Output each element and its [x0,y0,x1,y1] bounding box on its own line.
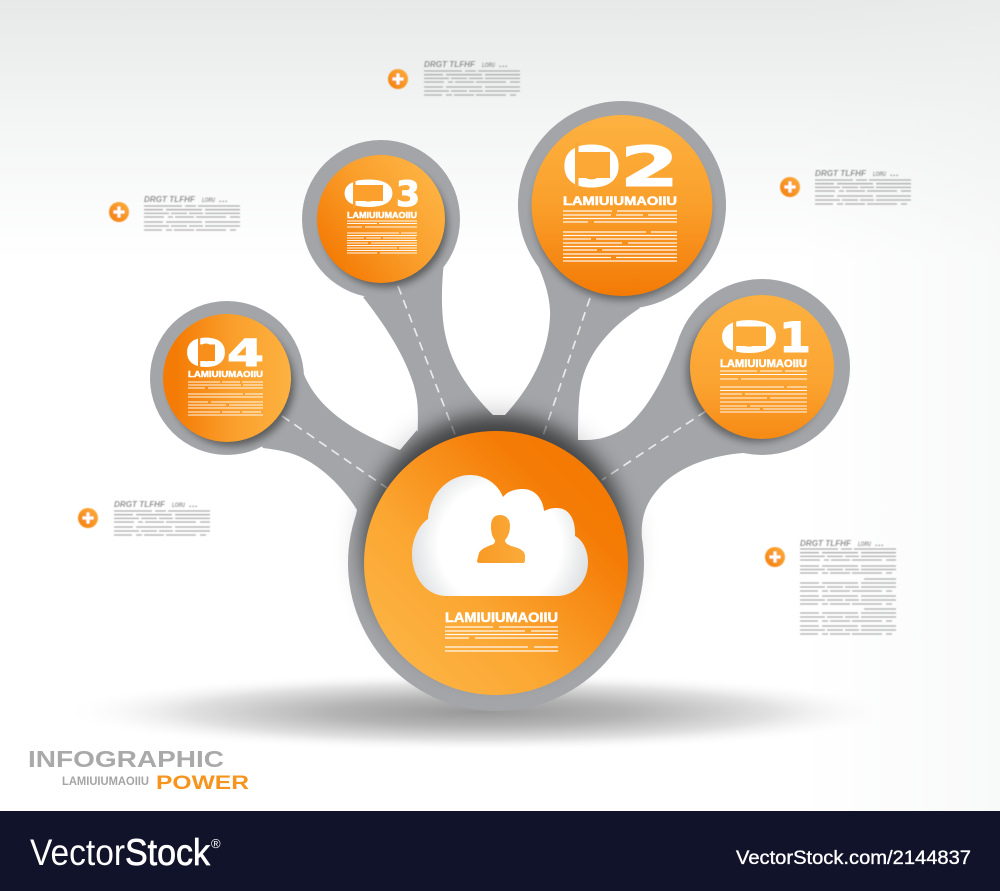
note: left of 03: DRGT TLFHF [144,194,196,204]
number 04 [185,332,264,375]
label 01: LAMIUIUMAOIIU [720,358,807,370]
note: right of 02: LORU [873,171,886,178]
footer bar [0,811,1000,891]
panel: central circle [364,431,628,695]
panel: circle 01 [690,295,834,439]
label 02: LAMIUIUMAOIIU [563,196,677,208]
note: right of 02 [780,168,911,204]
brand block: infographic power: INFOGRAPHIC [28,746,224,772]
note: right of 02: DRGT TLFHF [815,168,867,178]
icon: cloud with person [412,475,588,596]
brand block: infographic power [28,746,249,794]
note: top: LORU [482,62,495,69]
panel: circle 03 [317,155,445,283]
number 03 [342,175,420,215]
dashed connector lines [282,286,706,488]
panel: circle 04 [163,314,291,442]
note: left of 04: ... [189,499,198,509]
number 03: 3 [396,175,420,215]
number 03: 0 [342,175,395,215]
number 02: 2 [620,135,679,199]
note: left of 03: LORU [202,197,215,204]
note: left of 03 [109,194,240,230]
note: large right: ... [875,538,884,548]
registered mark: ® [211,836,221,851]
number 01: 0 [719,313,779,362]
image id: VectorStock.com/2144837 [736,848,971,869]
note: right of 02: ... [890,168,899,178]
note: top: DRGT TLFHF [424,59,476,69]
note: left of 04 [78,499,210,535]
panel: circle 02 [532,115,712,296]
text lines 03 [347,221,417,253]
note: large right: LORU [858,541,871,548]
label 04: LAMIUIUMAOIIU [188,369,263,379]
number 04: 0 [185,332,227,375]
footer logo: Stock [125,832,210,873]
note: left of 04: DRGT TLFHF [114,499,166,509]
central text lines [445,627,558,651]
panel: grey connector shape [150,101,850,711]
note: top: ... [499,59,508,69]
ground shadow [60,672,900,752]
text lines 01 [720,371,807,412]
text lines 04 [188,382,263,415]
brand block: infographic power: LAMIUIUMAOIIU [62,776,149,788]
number 01: 1 [779,313,811,362]
label 03: LAMIUIUMAOIIU [347,210,417,220]
brand block: infographic power: POWER [156,773,249,794]
text lines 02 [563,211,677,261]
note: large right [765,538,896,634]
note: top [388,59,520,95]
note: left of 03: ... [219,194,228,204]
circle shadows on grey shape [170,124,827,678]
number 02: 0 [561,135,622,199]
number 01 [719,313,811,362]
shadow spill of central circle onto white [360,412,632,684]
note: left of 04: LORU [172,502,185,509]
note: large right: DRGT TLFHF [800,538,852,548]
central label: LAMIUIUMAOIIU [445,609,558,625]
number 04: 4 [227,332,264,375]
number 02 [561,135,679,199]
footer logo: Vector [30,832,125,873]
